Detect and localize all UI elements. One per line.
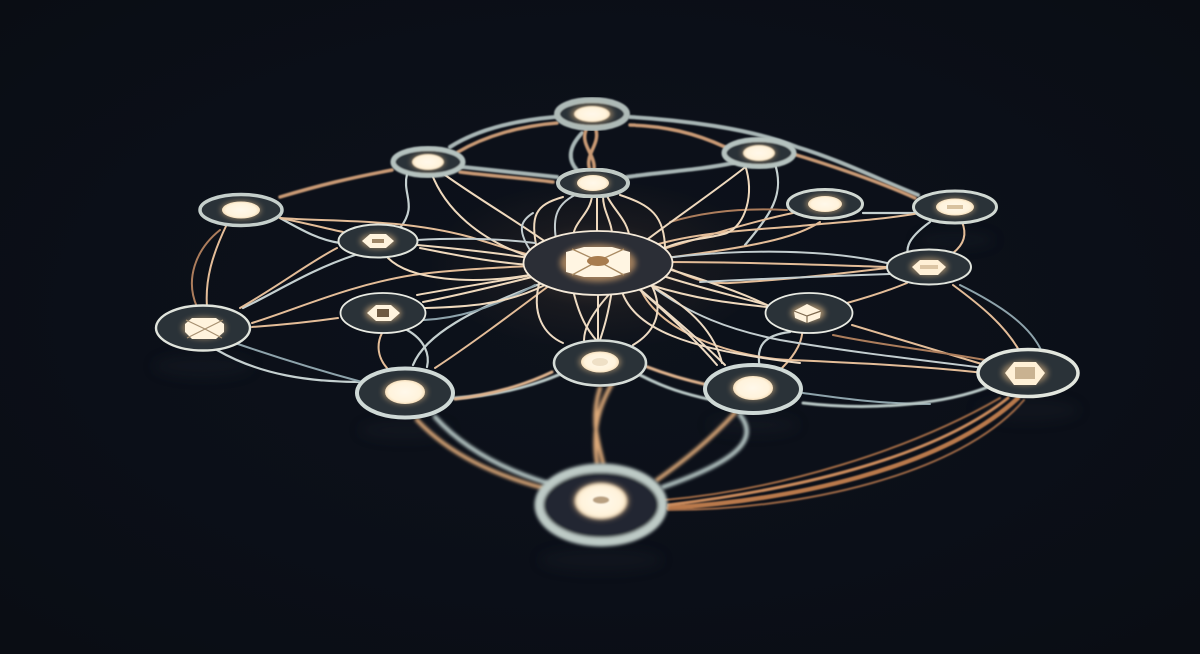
node: upper centre — [558, 170, 628, 196]
hub spokes: cream, left and top — [388, 165, 767, 308]
node: lower right — [705, 365, 801, 413]
node: lower left — [357, 368, 453, 418]
node floor reflections — [153, 232, 1080, 572]
outer links: copper — [192, 209, 985, 360]
central hub — [524, 231, 672, 295]
outer links: blue-grey thin — [235, 285, 1042, 404]
central glow — [428, 180, 768, 350]
node: top — [557, 100, 627, 128]
node: upper right — [724, 140, 794, 166]
near links to bottom node: grey — [435, 415, 747, 487]
node: inner right lower — [766, 293, 852, 333]
near links to bottom node: copper — [417, 370, 735, 488]
node: far left upper — [200, 194, 282, 226]
node: inner left lower — [340, 293, 426, 333]
node: lower centre — [554, 340, 646, 386]
node: upper left — [393, 148, 463, 176]
node: bottom — [539, 468, 663, 542]
node: far right lower — [978, 350, 1078, 396]
far arcs, top: blurred copper — [280, 123, 915, 198]
outer links: grey — [217, 164, 930, 382]
hub spokes: grey, upper and sides — [417, 195, 985, 368]
node: right middle — [887, 250, 971, 284]
hub icon: four-segment lens — [566, 247, 630, 277]
near links: N13 N14 N15 N16 — [455, 372, 988, 406]
node: far right upper — [914, 191, 996, 223]
node: right inner upper — [788, 190, 862, 218]
bottom sweep bundle: copper — [664, 398, 1024, 510]
node: inner left upper — [338, 224, 418, 258]
node: far left lower — [156, 306, 250, 350]
far arcs, top: blurred grey — [450, 117, 918, 195]
hub spokes: cream, bottom — [537, 280, 800, 365]
outer links: peach — [207, 213, 1020, 373]
